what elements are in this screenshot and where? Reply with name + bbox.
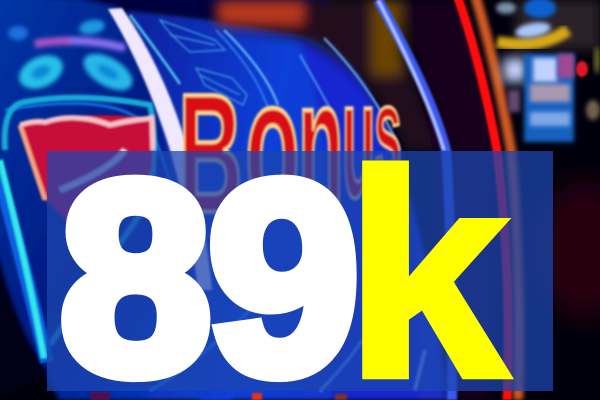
slot ornament lines	[160, 20, 247, 105]
blurred casino lights at right	[496, 0, 600, 320]
Bonus neon sign: s	[374, 62, 402, 203]
red neon arc	[457, 0, 519, 400]
Bonus neon sign: o	[245, 37, 300, 251]
cherry neon ornaments	[8, 18, 138, 98]
bottom strip glints	[90, 392, 347, 400]
upper reel dark gap	[215, 0, 497, 400]
main reel	[125, 10, 450, 400]
translucent blue panel with headline	[47, 151, 553, 391]
neon seven	[5, 98, 155, 345]
Bonus neon sign: u	[342, 46, 376, 233]
Bonus neon sign: n	[298, 43, 344, 244]
white reel strip	[5, 8, 212, 290]
left cyan neon tube	[0, 160, 47, 362]
neon arc blue	[216, 0, 452, 400]
reel detail under panel	[150, 300, 425, 391]
Bonus neon sign	[178, 37, 402, 251]
Bonus neon sign: B	[178, 58, 243, 248]
